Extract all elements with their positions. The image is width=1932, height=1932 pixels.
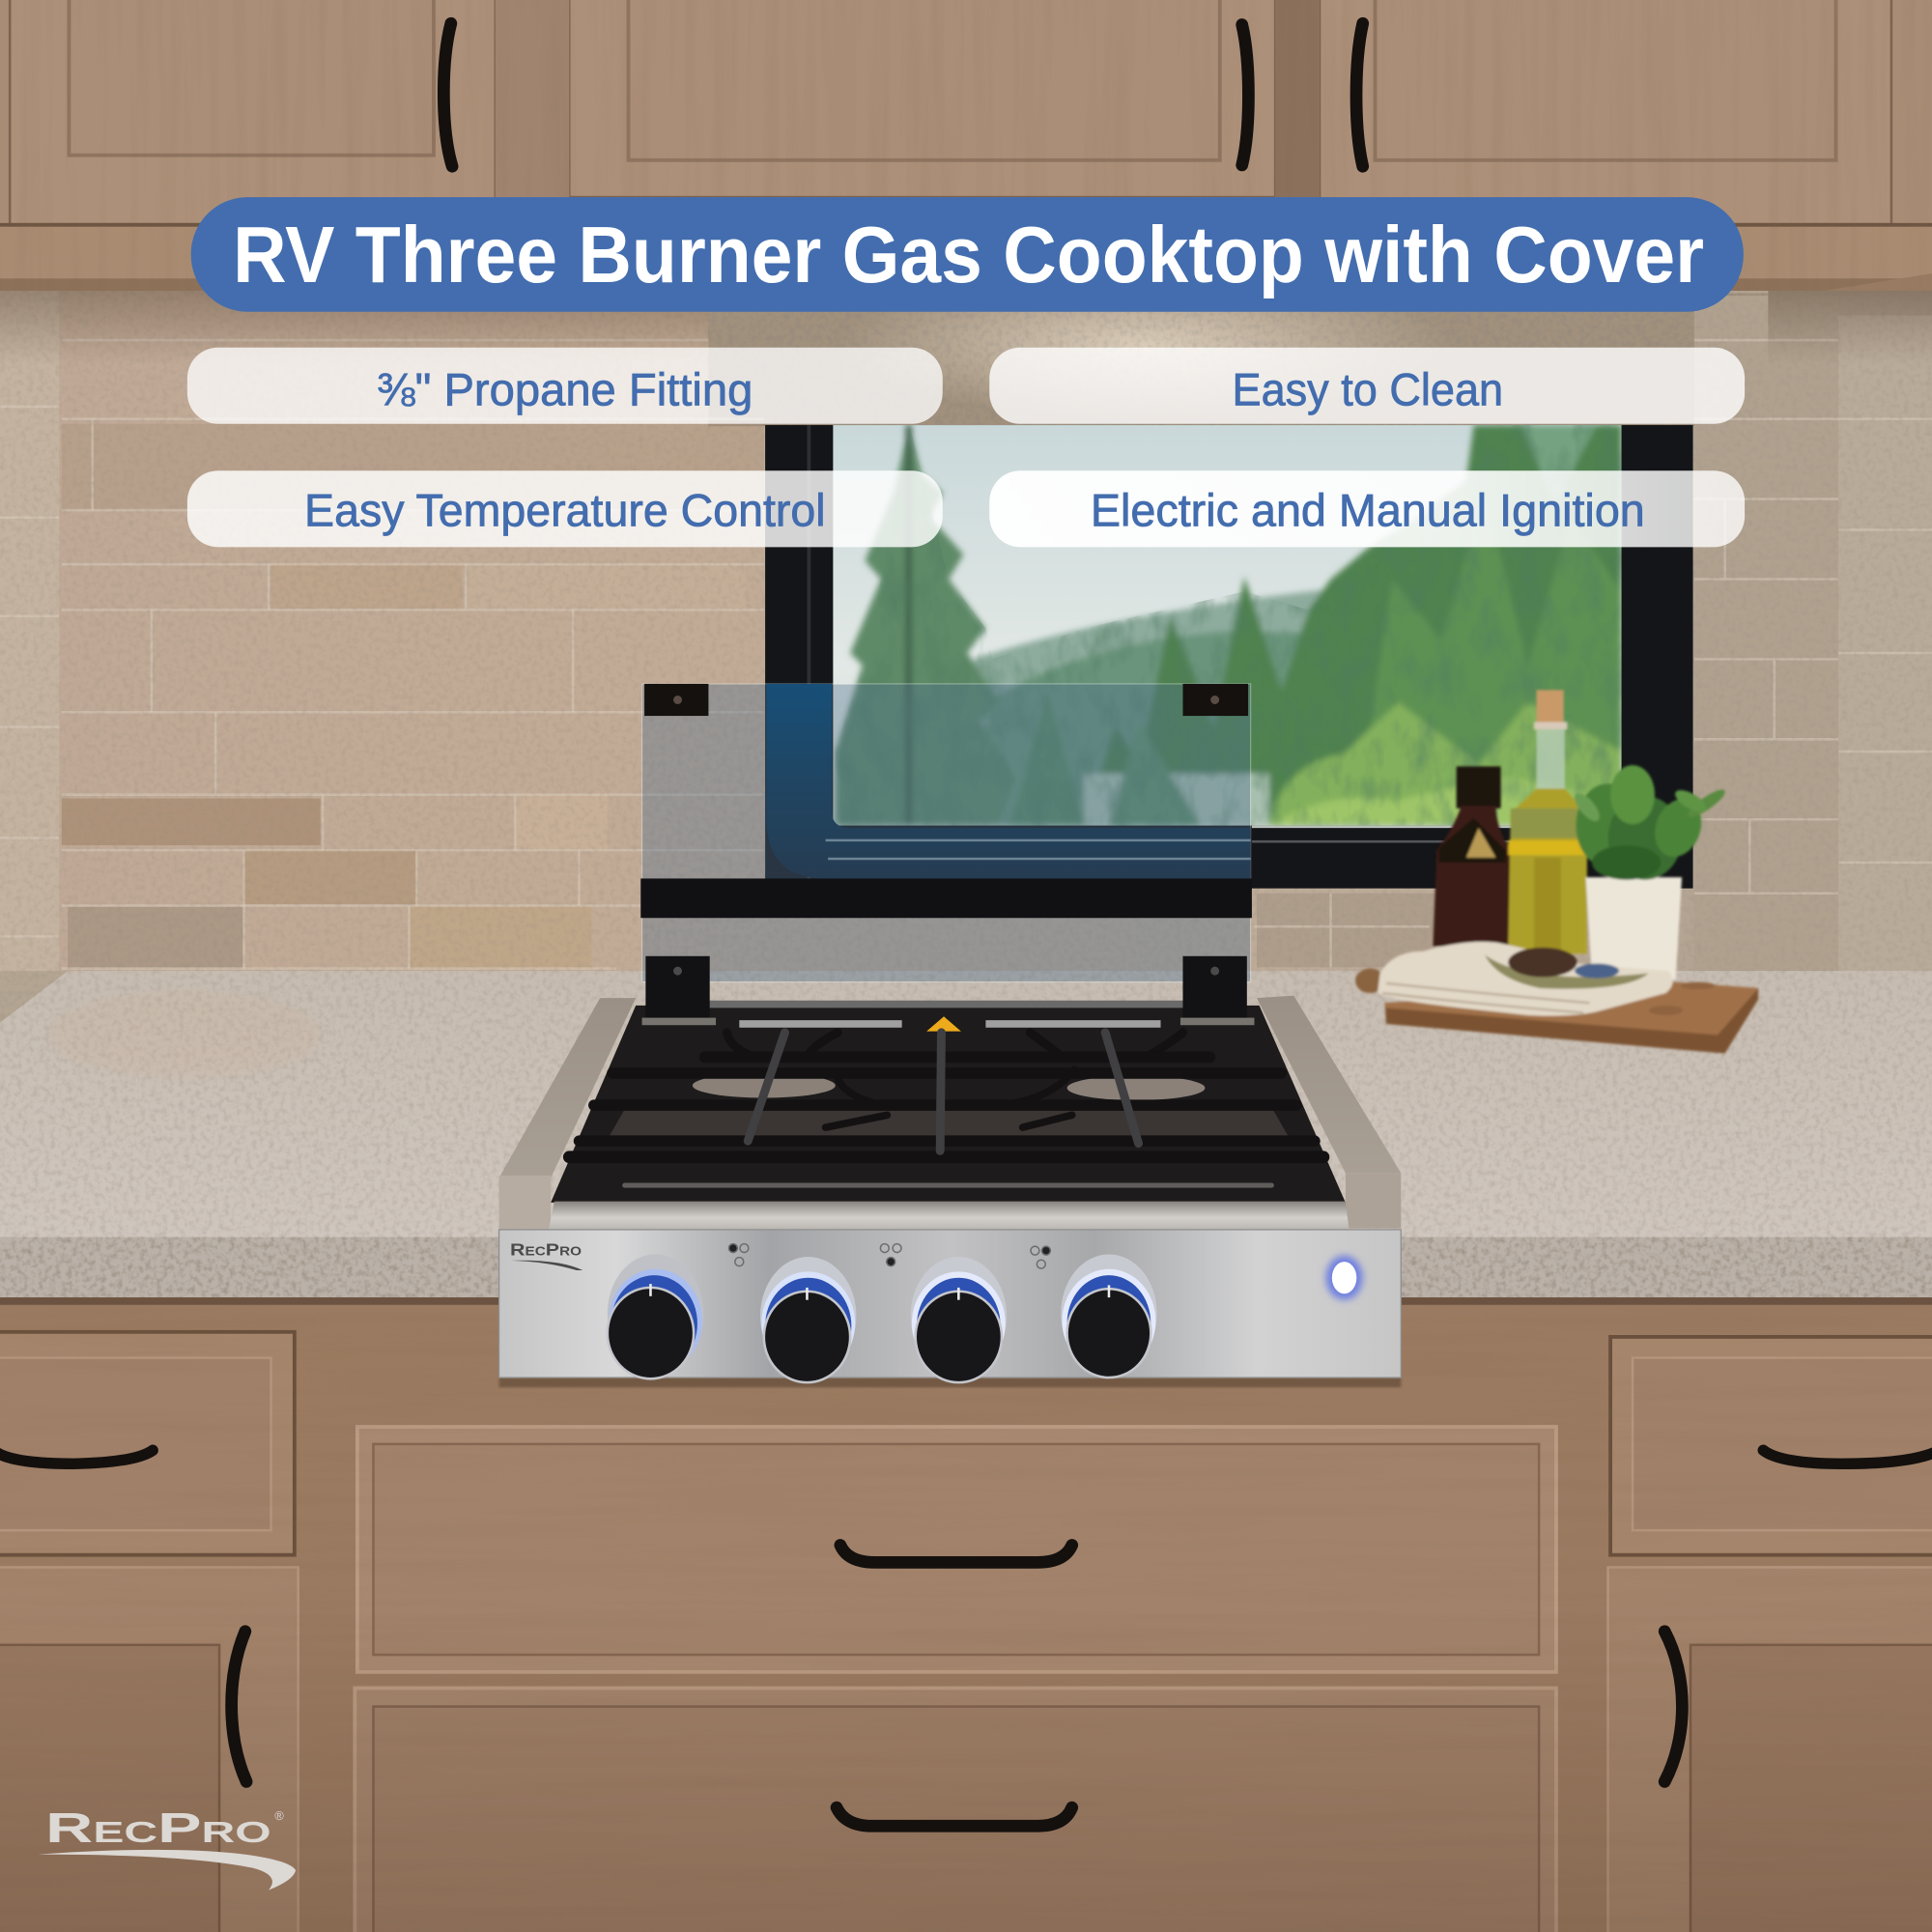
glass cover <box>640 684 1254 1025</box>
hinge right <box>1180 956 1254 1025</box>
cutting board <box>1355 969 1758 1054</box>
top clip left <box>644 684 708 716</box>
panel logo: R EC PRO <box>510 1240 582 1260</box>
knob 2 <box>760 1257 856 1382</box>
feature pill: propane fitting <box>187 348 943 424</box>
back strip and yellow indicator <box>647 1001 1244 1032</box>
decor: bottles, plant, towel, cutting board <box>1355 690 1758 1054</box>
burners and base plate <box>604 1073 1293 1146</box>
river and mid trees <box>1084 774 1269 826</box>
forest <box>1084 425 1622 826</box>
brand logo: R EC P RO <box>45 1805 271 1852</box>
handle: right door <box>1664 1632 1682 1781</box>
knob 4 <box>1061 1254 1157 1378</box>
right side rail <box>1257 996 1401 1173</box>
handle: left door <box>232 1632 246 1781</box>
tile backsplash wall <box>0 271 1932 1018</box>
right front block <box>1346 1173 1401 1229</box>
handle: upper left door <box>443 23 452 166</box>
cast iron grates <box>569 1033 1323 1185</box>
black center bar <box>640 878 1252 918</box>
feature pill: ignition <box>989 470 1745 547</box>
knob 1 <box>608 1254 703 1378</box>
top clip right <box>1182 684 1248 716</box>
hinge left <box>642 956 716 1025</box>
brand logo: ® <box>274 1808 284 1823</box>
window frame seen through glass <box>766 684 1251 878</box>
cooktop <box>499 996 1401 1382</box>
feature pill: easy to clean: Easy to Clean <box>1233 365 1503 416</box>
left side rail <box>499 998 636 1178</box>
lower cabinets <box>0 1297 1932 1932</box>
feature pill: ignition: Electric and Manual Ignition <box>1091 486 1645 537</box>
glass pane <box>642 684 1251 982</box>
far hills <box>970 587 1323 728</box>
handle: upper center door <box>1242 25 1248 165</box>
handle: left drawer <box>0 1450 153 1463</box>
front lip <box>549 1202 1350 1231</box>
steel control panel <box>499 1230 1401 1378</box>
handle: upper right door <box>1356 23 1363 166</box>
brown bottle <box>1433 766 1511 947</box>
title banner: RV Three Burner Gas Cooktop with Cover <box>233 210 1704 299</box>
countertop <box>0 971 1932 1297</box>
panel logo <box>510 1240 582 1270</box>
power indicator light <box>1325 1256 1363 1300</box>
black recess <box>551 1006 1346 1203</box>
handle: center top drawer <box>840 1545 1072 1562</box>
window with forest view <box>765 425 1693 889</box>
feature pill: temperature control <box>187 470 943 547</box>
feature pill: propane fitting: ⅜" Propane Fitting <box>377 365 753 416</box>
knob 3 <box>911 1257 1007 1382</box>
oil bottle <box>1508 690 1587 953</box>
folded towel <box>1378 942 1673 1016</box>
potted plant <box>1571 765 1728 980</box>
tall conifer <box>836 425 1016 826</box>
burner position dots <box>728 1244 1050 1268</box>
feature pill: temperature control: Easy Temperature Control <box>304 486 826 537</box>
upper cabinets <box>0 0 1932 327</box>
spice dish <box>1485 948 1649 989</box>
handle: center bottom drawer <box>837 1807 1072 1826</box>
left front block <box>499 1176 551 1230</box>
brand logo <box>39 1805 296 1890</box>
feature pill: easy to clean <box>989 348 1745 424</box>
handle: right drawer <box>1763 1450 1932 1463</box>
